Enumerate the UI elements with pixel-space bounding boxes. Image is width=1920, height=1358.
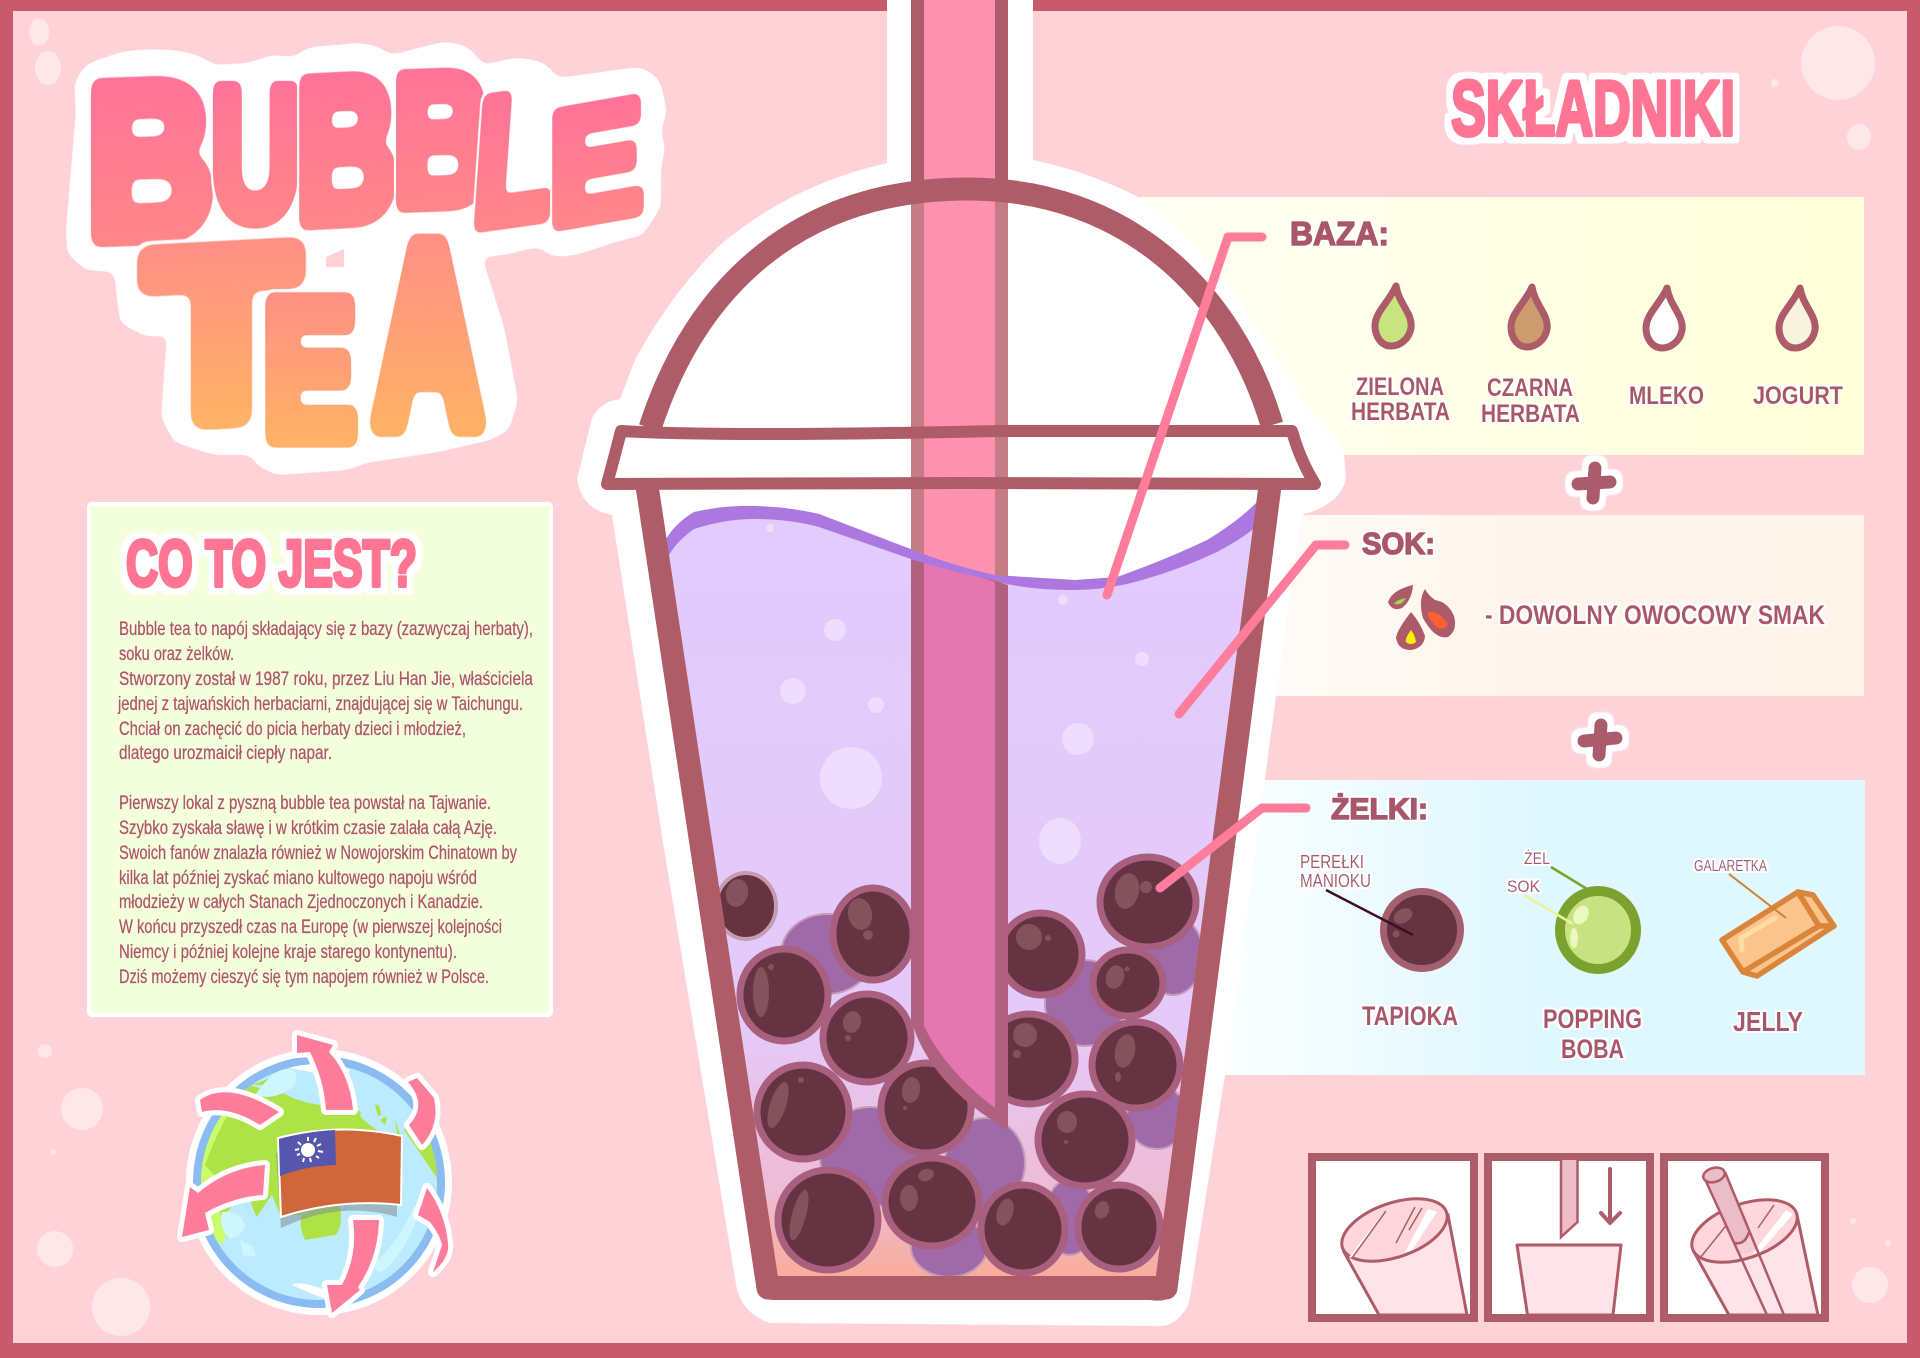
- body text: Bubble tea to napój składający się z bazy (zazwyczaj herbaty),: [119, 619, 533, 640]
- title letter E: E: [264, 261, 356, 479]
- straw: [908, 0, 1012, 1130]
- cup walls: [647, 486, 1270, 1288]
- label jelly: JELLY: [1733, 1006, 1803, 1037]
- pointer: baza: [1107, 237, 1262, 595]
- body text: [117, 619, 533, 988]
- body text: Chciał on zachęcić do picia herbaty dzieci i młodzież,: [119, 719, 466, 740]
- tapioca pearls: [716, 857, 1196, 1273]
- title letter A: A: [374, 194, 482, 478]
- title letter B: B: [296, 34, 397, 265]
- panel background: [89, 504, 551, 1015]
- label jogurt: JOGURT: [1753, 382, 1843, 410]
- label popping boba: POPPING: [1543, 1004, 1642, 1034]
- body text: Swoich fanów znalazła również w Nowojorskim Chinatown by: [119, 843, 517, 864]
- body text: W końcu przyszedł czas na Europę (w pierwszej kolejności: [119, 917, 502, 938]
- section: baza: [1290, 215, 1843, 428]
- label czarna herbata: [1481, 374, 1580, 428]
- body text: Pierwszy lokal z pyszną bubble tea powstał na Tajwanie.: [119, 793, 491, 814]
- step 2: straw going into the cup: [1488, 1157, 1650, 1318]
- icon: yoghurt drop: [1779, 288, 1815, 348]
- body text: młodzieży w całych Stanach Zjednoczonych i Kanadzie.: [119, 892, 483, 913]
- title letter T: T: [148, 198, 295, 470]
- text: any fruit flavour: - DOWOLNY OWOCOWY SMAK: [1485, 600, 1825, 630]
- label perelki manioku: PEREŁKI: [1300, 852, 1364, 872]
- label sok: SOK:: [1362, 526, 1435, 561]
- jelly cube icon: [1722, 874, 1834, 976]
- label perelki manioku: MANIOKU: [1300, 871, 1371, 891]
- straw inside the lid: [924, 190, 995, 583]
- panel: co to jest: [89, 504, 551, 1015]
- lid rim: [607, 431, 1315, 484]
- title white outline: [66, 42, 667, 475]
- continents: [200, 1061, 437, 1300]
- label czarna herbata: HERBATA: [1481, 400, 1580, 428]
- body text: dlatego urozmaicił ciepły napar.: [119, 743, 332, 764]
- icon: green tea drop: [1375, 286, 1411, 346]
- heading: skladniki: SKŁADNIKI: [1451, 64, 1735, 152]
- pointer: sok: [1179, 545, 1345, 714]
- body text: jednej z tajwańskich herbaciarni, znajdującej się w Taichungu.: [117, 694, 523, 715]
- label zielona herbata: [1351, 373, 1450, 426]
- arrows spreading around the globe: [182, 1035, 448, 1313]
- label zielona herbata: ZIELONA: [1356, 373, 1444, 401]
- globe sphere: [197, 1060, 441, 1304]
- label zielona herbata: HERBATA: [1351, 398, 1450, 426]
- body text: Dziś możemy cieszyć się tym napojem również w Polsce.: [119, 967, 489, 988]
- label mleko: MLEKO: [1629, 382, 1704, 410]
- body text: soku oraz żelków.: [119, 644, 234, 665]
- panel: zelki: [1220, 780, 1865, 1075]
- flag sun: [295, 1137, 323, 1162]
- body text: kilka lat później zyskać miano kultowego napoju wśród: [119, 868, 477, 889]
- pointer: zelki: [1160, 808, 1306, 888]
- panel: sok: [1270, 515, 1864, 696]
- title letter E: E: [549, 66, 643, 261]
- straw above the lid: [924, 0, 995, 190]
- flag: [278, 1129, 402, 1217]
- tapioca pearl icon: [1326, 890, 1460, 968]
- flag shadow: [276, 1150, 397, 1228]
- label popping boba: BOBA: [1561, 1034, 1624, 1064]
- section: zelki: [1300, 793, 1834, 1064]
- icon: black tea drop: [1511, 287, 1547, 347]
- surface band over straw: [908, 548, 1012, 584]
- plus sign: [1584, 725, 1616, 755]
- popping boba icon: [1524, 867, 1636, 969]
- flag canton: [279, 1130, 336, 1176]
- pearl highlights: [723, 871, 1152, 1242]
- title letter B: B: [393, 35, 490, 245]
- straw inside the drink: [911, 553, 1008, 1130]
- step 1: cup with sealed top: [1312, 1157, 1474, 1318]
- label sok: SOK: [1507, 877, 1541, 896]
- panel: baza: [1140, 197, 1864, 455]
- liquid: [664, 505, 1262, 1282]
- label zel: ŻEL: [1524, 849, 1550, 868]
- label zelki: ŻELKI:: [1331, 793, 1428, 826]
- label galaretka: GALARETKA: [1694, 858, 1767, 875]
- step 3: cup with the straw inside: [1664, 1157, 1825, 1318]
- label popping boba: [1543, 1004, 1642, 1064]
- icon: milk drop: [1646, 288, 1682, 348]
- tea surface band: [663, 500, 1259, 590]
- label baza: BAZA:: [1290, 215, 1389, 252]
- cup white halo: [577, 0, 1346, 1326]
- title: BUBBLE TEA: [66, 34, 667, 479]
- body text: Stworzony został w 1987 roku, przez Liu Han Jie, właściciela: [119, 669, 533, 690]
- title letter U: U: [211, 49, 301, 259]
- globe with flag of Taiwan and arrows: [182, 1035, 452, 1315]
- icon: fruit juice drops: [1388, 585, 1455, 650]
- bubbles in the drink: [766, 524, 1149, 864]
- body text: Niemcy i później kolejne kraje starego kontynentu).: [119, 942, 457, 963]
- bubble tea cup: [577, 0, 1346, 1326]
- plus sign: [1578, 468, 1610, 498]
- label tapioka: TAPIOKA: [1362, 1001, 1458, 1031]
- title letter B: B: [87, 36, 213, 284]
- title letter L: L: [468, 53, 560, 265]
- label perelki manioku: [1300, 852, 1371, 891]
- label czarna herbata: CZARNA: [1487, 374, 1573, 402]
- section: sok: [1362, 526, 1825, 650]
- lid dome outline: [650, 189, 1272, 428]
- taro purple pearls: [781, 914, 1203, 1277]
- cup base: [760, 1276, 1174, 1301]
- heading: co to jest: CO TO JEST?: [126, 526, 417, 600]
- title gap: [326, 249, 344, 267]
- globe halo: [186, 1049, 452, 1315]
- body text: Szybko zyskała sławę i w krótkim czasie zalała całą Azję.: [119, 818, 497, 839]
